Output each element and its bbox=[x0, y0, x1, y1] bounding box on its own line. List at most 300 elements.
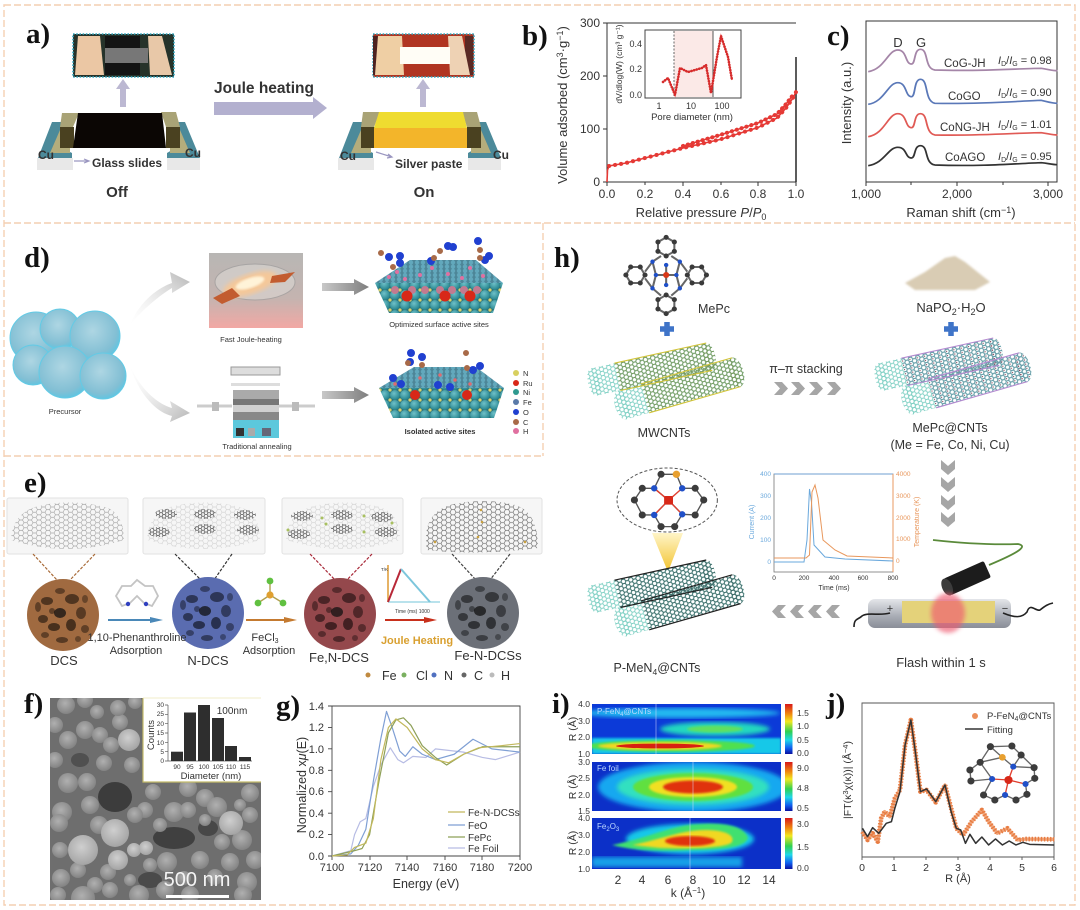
graphene box 2 bbox=[143, 498, 265, 554]
spectra curves bbox=[868, 49, 1057, 166]
panel label a: a) bbox=[26, 18, 50, 50]
label: MePc: MePc bbox=[698, 302, 730, 316]
legend: elements: Fe bbox=[382, 669, 397, 683]
chevrons down bbox=[941, 460, 955, 527]
R tick labels: 2.5 bbox=[578, 773, 590, 783]
molecule: MePc bbox=[626, 237, 706, 314]
label: traditional annealing: Traditional annealing bbox=[222, 442, 292, 451]
arrow: grey bottom bbox=[322, 387, 369, 403]
panel label f: f) bbox=[24, 688, 43, 720]
x tick labels: 7160 bbox=[433, 862, 457, 874]
legend: atoms: N bbox=[523, 369, 528, 378]
x tick labels: 1,000 bbox=[851, 187, 881, 201]
x tick labels: 1 bbox=[891, 862, 897, 874]
connector lines bbox=[33, 554, 510, 582]
y axis title: −1 bbox=[555, 31, 565, 41]
sphere: N-DCS bbox=[172, 577, 244, 649]
x tick labels: 0.2 bbox=[637, 187, 654, 201]
label: P-MeN4@CNTs: 4 bbox=[652, 667, 657, 677]
chart: current and temperature: 400 bbox=[829, 575, 840, 582]
inset: diameter histogram: 115 bbox=[240, 764, 251, 771]
legend: atoms: C bbox=[523, 418, 529, 427]
label: NaPO2·H2O: NaPO bbox=[916, 300, 952, 315]
label: NaPO2·H2O: ·H bbox=[957, 300, 970, 315]
chart: current and temperature: 800 bbox=[888, 575, 899, 582]
label: MePc@CNTs: (Me = Fe, Co, Ni, Cu) bbox=[890, 438, 1010, 452]
colorbars bbox=[785, 704, 792, 869]
legend: elements: H bbox=[501, 669, 510, 683]
panel label h: h) bbox=[554, 242, 580, 274]
R axis titles bbox=[566, 717, 579, 855]
chart: current and temperature: 400 bbox=[760, 471, 771, 478]
heatmap: P-FeN4@CNTs bbox=[580, 704, 781, 754]
y tick labels: 0.2 bbox=[309, 829, 324, 841]
sphere: Fe,N-DCS bbox=[304, 578, 376, 650]
label: isolated active sites: Isolated active sites bbox=[405, 427, 475, 436]
label: optimized surface active sites: Optimized surface active sites bbox=[389, 320, 489, 329]
peak labels bbox=[893, 35, 926, 50]
arrow: curved up bbox=[130, 272, 190, 325]
tubes: P-MeN4@CNTs bbox=[585, 559, 747, 638]
heading: joule heating: Joule heating bbox=[214, 80, 314, 97]
x tick labels: 6 bbox=[1051, 862, 1057, 874]
panel label b: b) bbox=[522, 20, 548, 52]
mini chart: joule heat pulse: Time (ms) 1000 bbox=[395, 609, 430, 615]
colorbar labels: 9.0 bbox=[797, 763, 809, 773]
heatmap: Fe2O3: 3 bbox=[616, 827, 620, 833]
series labels: CoG-JH bbox=[944, 58, 986, 70]
label: Cu: Cu bbox=[185, 146, 201, 160]
panel d: precursor annealing routes bbox=[10, 241, 533, 451]
label: FeCl3 adsorption: 3 bbox=[275, 638, 279, 645]
k axis title: ) bbox=[701, 886, 705, 900]
inset: diameter histogram: 110 bbox=[226, 764, 237, 771]
y tick labels: 0 bbox=[593, 175, 600, 189]
x tick labels: 3,000 bbox=[1033, 187, 1063, 201]
ratio labels: D bbox=[1001, 61, 1006, 68]
label: Cu: Cu bbox=[340, 149, 356, 163]
light beam bbox=[652, 533, 683, 572]
R tick labels: 1.0 bbox=[578, 864, 590, 874]
k axis title: −1 bbox=[692, 886, 702, 895]
x tick labels: 0.4 bbox=[675, 187, 692, 201]
heatmap: Fe2O3: 2 bbox=[606, 827, 610, 833]
pointer: glass slides bbox=[74, 159, 89, 163]
ratio labels: I bbox=[998, 55, 1001, 67]
label: precursor: Precursor bbox=[49, 407, 82, 416]
y tick labels: 1.0 bbox=[309, 744, 324, 756]
R axis titles: R (Å) bbox=[566, 775, 579, 799]
EXAFS curves bbox=[862, 720, 1054, 845]
R axis titles: R (Å) bbox=[566, 831, 579, 855]
ratio labels: G bbox=[1012, 125, 1018, 132]
panel f: SEM image with histogram bbox=[24, 688, 264, 910]
colorbar labels: 1.5 bbox=[797, 842, 809, 852]
x tick labels: 1.0 bbox=[788, 187, 805, 201]
colorbar labels: 1.5 bbox=[797, 708, 809, 718]
arrow: red bbox=[385, 617, 437, 623]
k axis title: k (Å bbox=[671, 886, 692, 900]
R tick labels: 3.0 bbox=[578, 757, 590, 767]
chart: current and temperature: 3000 bbox=[896, 493, 911, 500]
label: glass slides: Glass slides bbox=[92, 156, 162, 170]
label: off: Off bbox=[106, 184, 129, 201]
tubes: MWCNTs bbox=[585, 342, 747, 421]
ratio labels: / bbox=[1006, 119, 1010, 131]
colorbar labels: 0.5 bbox=[797, 803, 809, 813]
ratio labels: D bbox=[1001, 157, 1006, 164]
y axis title: Intensity (a.u.) bbox=[839, 62, 854, 144]
y axis title: ) bbox=[555, 26, 570, 31]
R tick labels: 2.0 bbox=[578, 790, 590, 800]
label: FeCl3 adsorption: Adsorption bbox=[243, 645, 295, 657]
y axis title: 3 bbox=[555, 52, 565, 57]
chevrons right bbox=[774, 382, 841, 395]
molecule: 1,10-phenanthroline bbox=[116, 580, 158, 606]
series labels: CoGO bbox=[948, 91, 981, 103]
arrow: grey top bbox=[322, 279, 369, 295]
powder: NaPO2 bbox=[905, 256, 990, 290]
label: DCS: DCS bbox=[50, 653, 78, 668]
arrow: joule heating bbox=[214, 97, 327, 119]
x axis title: Relative pressure P/P bbox=[636, 205, 761, 220]
ratio labels: G bbox=[1012, 157, 1018, 164]
y axis title: 3 bbox=[841, 790, 850, 795]
scale bar bbox=[166, 895, 229, 898]
panel label j: j) bbox=[825, 688, 845, 720]
ratio labels: = 0.95 bbox=[1018, 151, 1052, 163]
legend: P-FeN bbox=[987, 711, 1014, 722]
colorbar labels: 0.0 bbox=[797, 863, 809, 873]
label: phenanthroline adsorption: 1,10-Phenanthroline bbox=[87, 632, 187, 644]
legend: atoms: O bbox=[523, 408, 529, 417]
mini chart: joule heat pulse bbox=[381, 565, 440, 615]
XANES curves bbox=[332, 711, 520, 856]
colorbar labels: 4.8 bbox=[797, 783, 809, 793]
colorbar labels: 0.5 bbox=[797, 735, 809, 745]
panel g: XANES chart bbox=[276, 690, 532, 891]
R axis titles: R (Å) bbox=[566, 717, 579, 741]
ratio labels: I bbox=[1009, 119, 1012, 131]
legend: elements: Cl bbox=[416, 669, 428, 683]
x tick labels: 0.8 bbox=[750, 187, 767, 201]
chevrons left bbox=[772, 605, 840, 618]
photo: fast joule heating bbox=[209, 253, 303, 328]
ratio labels: G bbox=[1012, 93, 1018, 100]
ratio labels: / bbox=[1006, 151, 1010, 163]
heatmap: Fe2O3: O bbox=[610, 822, 616, 831]
chart: current and temperature: 200 bbox=[799, 575, 810, 582]
inset: pore size distribution: 10 bbox=[686, 101, 696, 111]
y axis title: Volume adsorbed (cm bbox=[555, 57, 570, 184]
chart: current and temperature: 2000 bbox=[896, 515, 911, 522]
graphene box 4 bbox=[421, 498, 542, 554]
slab: isolated sites bbox=[379, 353, 504, 418]
device off bbox=[37, 112, 200, 170]
legend bbox=[448, 808, 520, 855]
ratio labels: = 0.90 bbox=[1018, 87, 1052, 99]
ratio labels: / bbox=[1006, 55, 1010, 67]
R tick labels: 2.0 bbox=[578, 732, 590, 742]
panel label g: g) bbox=[276, 690, 300, 722]
arrow: up right bbox=[416, 79, 430, 107]
y tick labels: 1.4 bbox=[309, 701, 324, 713]
y tick labels: 0.8 bbox=[309, 765, 324, 777]
plot frame bbox=[603, 23, 796, 186]
legend: Fe-N-DCSs bbox=[468, 808, 520, 819]
panel label d: d) bbox=[24, 242, 50, 274]
heatmap: Fe foil: Fe foil bbox=[597, 764, 619, 773]
label: Fe,N-DCS: Fe,N-DCS bbox=[309, 650, 369, 665]
label: silver paste: Silver paste bbox=[395, 157, 463, 171]
molecule: FeN4 inset bbox=[970, 746, 1035, 800]
y tick labels bbox=[309, 701, 324, 863]
inset: pore size distribution: 0.0 bbox=[629, 90, 642, 100]
y tick labels: 200 bbox=[580, 69, 600, 83]
chart: current and temperature bbox=[749, 471, 921, 592]
inset: diameter histogram: 100nm bbox=[217, 706, 247, 717]
ratio labels: D bbox=[1001, 125, 1006, 132]
label: P-MeN4@CNTs: @CNTs bbox=[657, 661, 700, 675]
label: Cu: Cu bbox=[493, 148, 509, 162]
label: NaPO2·H2O: 2 bbox=[970, 307, 976, 317]
plot frame bbox=[862, 703, 1054, 860]
chart: current and temperature: 0 bbox=[767, 559, 771, 566]
pointer: silver paste bbox=[376, 152, 392, 158]
heatmap: P-FeN4@CNTs: P-FeN bbox=[597, 707, 620, 716]
y tick labels: 100 bbox=[580, 122, 600, 136]
x tick labels: 0 bbox=[859, 862, 865, 874]
y tick labels bbox=[580, 16, 600, 189]
inset: pore size distribution: 100 bbox=[714, 101, 730, 111]
device on bbox=[338, 112, 501, 170]
inset: diameter histogram: 25 bbox=[157, 711, 164, 718]
x tick labels: 2 bbox=[923, 862, 929, 874]
heatmap: P-FeN4@CNTs: @CNTs bbox=[623, 707, 651, 716]
graphene box 3 bbox=[282, 498, 403, 554]
R tick labels: 4.0 bbox=[578, 699, 590, 709]
x tick labels: 4 bbox=[987, 862, 993, 874]
heatmap: P-FeN4@CNTs: 4 bbox=[620, 712, 624, 718]
inset: diameter histogram bbox=[143, 698, 261, 782]
plot frame bbox=[328, 706, 520, 860]
x tick labels: 0.6 bbox=[713, 187, 730, 201]
panel j: EXAFS fit chart bbox=[825, 688, 1057, 885]
k tick labels: 8 bbox=[690, 873, 697, 887]
inset: diameter histogram: 15 bbox=[157, 730, 164, 737]
arrow: orange bbox=[246, 617, 297, 623]
y axis title: −4 bbox=[841, 745, 850, 753]
legend: FeO bbox=[468, 821, 488, 832]
k tick labels: 10 bbox=[712, 873, 726, 887]
legend: atoms: Fe bbox=[523, 398, 532, 407]
legend: elements: N bbox=[444, 669, 453, 683]
ratio labels: D bbox=[1001, 93, 1006, 100]
inset: diameter histogram: 20 bbox=[157, 721, 164, 728]
x tick labels: 7200 bbox=[508, 862, 532, 874]
label: P-MeN4@CNTs: P-MeN bbox=[614, 661, 652, 675]
legend: FePc bbox=[468, 833, 491, 844]
legend: atoms: H bbox=[523, 427, 528, 436]
x tick labels: 7120 bbox=[358, 862, 382, 874]
legend: atoms: Ru bbox=[523, 379, 533, 388]
chart: current and temperature: Current (A) bbox=[749, 505, 756, 539]
x tick labels: 2,000 bbox=[942, 187, 972, 201]
heatmap: Fe2O3: Fe bbox=[597, 822, 606, 831]
legend: elements: C bbox=[474, 669, 483, 683]
plus left bbox=[660, 322, 674, 336]
panel e: fe-n-dcs synthesis bbox=[7, 467, 542, 683]
flash reactor bbox=[854, 593, 1053, 633]
legend: Fe Foil bbox=[468, 844, 499, 855]
x tick labels: 5 bbox=[1019, 862, 1025, 874]
label: on: On bbox=[414, 184, 434, 201]
y tick labels: 300 bbox=[580, 16, 600, 30]
chart: current and temperature: 0 bbox=[772, 575, 776, 582]
panel label c: c) bbox=[827, 20, 850, 52]
peak labels: G bbox=[916, 35, 926, 50]
panel b: adsorption isotherm chart bbox=[522, 16, 805, 222]
panel label i: i) bbox=[552, 688, 570, 720]
inset: diameter histogram: 90 bbox=[173, 764, 181, 771]
heatmap: Fe foil bbox=[592, 762, 788, 812]
y axis title: |FT(κ bbox=[842, 795, 854, 819]
arrow: curved down bbox=[130, 366, 190, 422]
inset: diameter histogram: 30 bbox=[157, 702, 164, 709]
legend: atoms: Ni bbox=[523, 388, 530, 397]
x axis title: R (Å) bbox=[945, 872, 971, 885]
photo: device off bbox=[73, 34, 174, 77]
inset: diameter histogram: 5 bbox=[160, 749, 164, 756]
chart: current and temperature: 300 bbox=[760, 493, 771, 500]
x axis title: −1 bbox=[1001, 205, 1011, 215]
k tick labels: 14 bbox=[762, 873, 776, 887]
plus right bbox=[944, 322, 958, 336]
peak labels: D bbox=[893, 35, 903, 50]
x tick labels: 7140 bbox=[395, 862, 419, 874]
x tick labels bbox=[859, 862, 1057, 874]
R tick labels: 4.0 bbox=[578, 813, 590, 823]
label: MWCNTs: MWCNTs bbox=[638, 426, 690, 440]
y axis title: χ(κ))| (Å bbox=[841, 753, 854, 790]
ratio labels: I bbox=[998, 151, 1001, 163]
label: scale 500 nm: 500 nm bbox=[164, 869, 230, 891]
inset: pore size distribution: dV/dlog(W) (cm³ g⁻¹) bbox=[614, 24, 624, 104]
panel i: wavelet transform heatmaps bbox=[552, 688, 809, 900]
inset: diameter histogram: Diameter (nm) bbox=[181, 771, 241, 782]
x tick labels bbox=[320, 862, 532, 874]
inset: pore size distribution: 0.2 bbox=[629, 64, 642, 74]
panel h: P-MeN4@CNTs flash synthesis bbox=[554, 237, 1053, 677]
ratio labels: I bbox=[1009, 87, 1012, 99]
legend: 4 bbox=[1014, 716, 1018, 723]
ratio labels bbox=[998, 55, 1052, 164]
icon: tube furnace bbox=[197, 367, 315, 438]
y tick labels: 0.4 bbox=[309, 808, 324, 820]
cable: green bbox=[933, 540, 1022, 565]
x tick labels: 7180 bbox=[470, 862, 494, 874]
chart: current and temperature: Time (ms) bbox=[818, 585, 850, 592]
label: NaPO2·H2O: 2 bbox=[952, 307, 957, 317]
ratio labels: I bbox=[1009, 55, 1012, 67]
ratio labels: / bbox=[1006, 87, 1010, 99]
inset: diameter histogram: 105 bbox=[213, 764, 224, 771]
y tick labels: 0.0 bbox=[309, 851, 324, 863]
chart: current and temperature: 200 bbox=[760, 515, 771, 522]
mini chart: joule heat pulse: T/K bbox=[381, 567, 388, 572]
flash reactor: + bbox=[887, 603, 893, 615]
x axis title: ) bbox=[1011, 205, 1016, 220]
chart: current and temperature: 0 bbox=[896, 558, 900, 565]
flash reactor: − bbox=[1002, 603, 1008, 615]
series labels bbox=[940, 58, 990, 164]
sphere: DCS bbox=[27, 579, 99, 651]
inset: diameter histogram: 95 bbox=[186, 764, 194, 771]
R tick labels: 1.5 bbox=[578, 806, 590, 816]
R tick labels bbox=[578, 699, 590, 874]
graphene box 1 bbox=[7, 498, 128, 554]
x tick labels: 0.0 bbox=[599, 187, 616, 201]
R tick labels: 2.0 bbox=[578, 847, 590, 857]
photo: device on bbox=[373, 34, 474, 77]
dashed ellipse: P-MeN4 structure bbox=[617, 468, 717, 532]
molecule: FeCl3 bbox=[255, 578, 286, 606]
inset: diameter histogram: 0 bbox=[160, 758, 164, 765]
inset: pore size distribution: Pore diameter (nm) bbox=[651, 112, 733, 123]
arrow: up left bbox=[116, 79, 130, 107]
legend: elements bbox=[366, 669, 510, 683]
x axis title: 0 bbox=[761, 212, 766, 222]
label: N-DCS: N-DCS bbox=[187, 653, 229, 668]
colorbar labels: 1.0 bbox=[797, 721, 809, 731]
label: MePc@CNTs: MePc@CNTs bbox=[912, 421, 988, 435]
legend bbox=[965, 711, 1051, 736]
R tick labels: 1.0 bbox=[578, 749, 590, 759]
colorbar labels bbox=[797, 708, 809, 873]
SEM micrograph bbox=[47, 692, 264, 910]
chart: current and temperature: 600 bbox=[858, 575, 869, 582]
ratio labels: I bbox=[998, 119, 1001, 131]
slab: optimized surface bbox=[375, 241, 503, 313]
label: Cu: Cu bbox=[38, 148, 54, 162]
k tick labels: 12 bbox=[737, 873, 751, 887]
ratio labels: I bbox=[1009, 151, 1012, 163]
R tick labels: 3.0 bbox=[578, 830, 590, 840]
label: Fe-N-DCSs: Fe-N-DCSs bbox=[454, 648, 522, 663]
x tick labels bbox=[599, 187, 805, 201]
chart: current and temperature: 1000 bbox=[896, 536, 911, 543]
label: joule heating: Joule Heating bbox=[381, 635, 453, 647]
colorbar labels: 3.0 bbox=[797, 819, 809, 829]
k tick labels: 6 bbox=[665, 873, 672, 887]
ratio labels: G bbox=[1012, 61, 1018, 68]
y tick labels: 0.6 bbox=[309, 786, 324, 798]
panel label e: e) bbox=[24, 467, 47, 499]
x tick labels: 7100 bbox=[320, 862, 344, 874]
arrow: blue bbox=[108, 617, 163, 623]
isotherm curve bbox=[607, 92, 796, 182]
ratio labels: = 1.01 bbox=[1018, 119, 1052, 131]
inset: pore size distribution: 0.4 bbox=[629, 39, 642, 49]
camera bbox=[939, 561, 991, 597]
label: NaPO2·H2O: O bbox=[976, 300, 986, 315]
panel a: joule heating device bbox=[26, 18, 509, 201]
y tick labels: 1.2 bbox=[309, 722, 324, 734]
sphere: Fe-N-DCSs bbox=[447, 577, 519, 649]
tubes: MePc@CNTs bbox=[872, 337, 1034, 416]
x axis title: Energy (eV) bbox=[393, 877, 459, 891]
series labels: CoNG-JH bbox=[940, 122, 990, 134]
